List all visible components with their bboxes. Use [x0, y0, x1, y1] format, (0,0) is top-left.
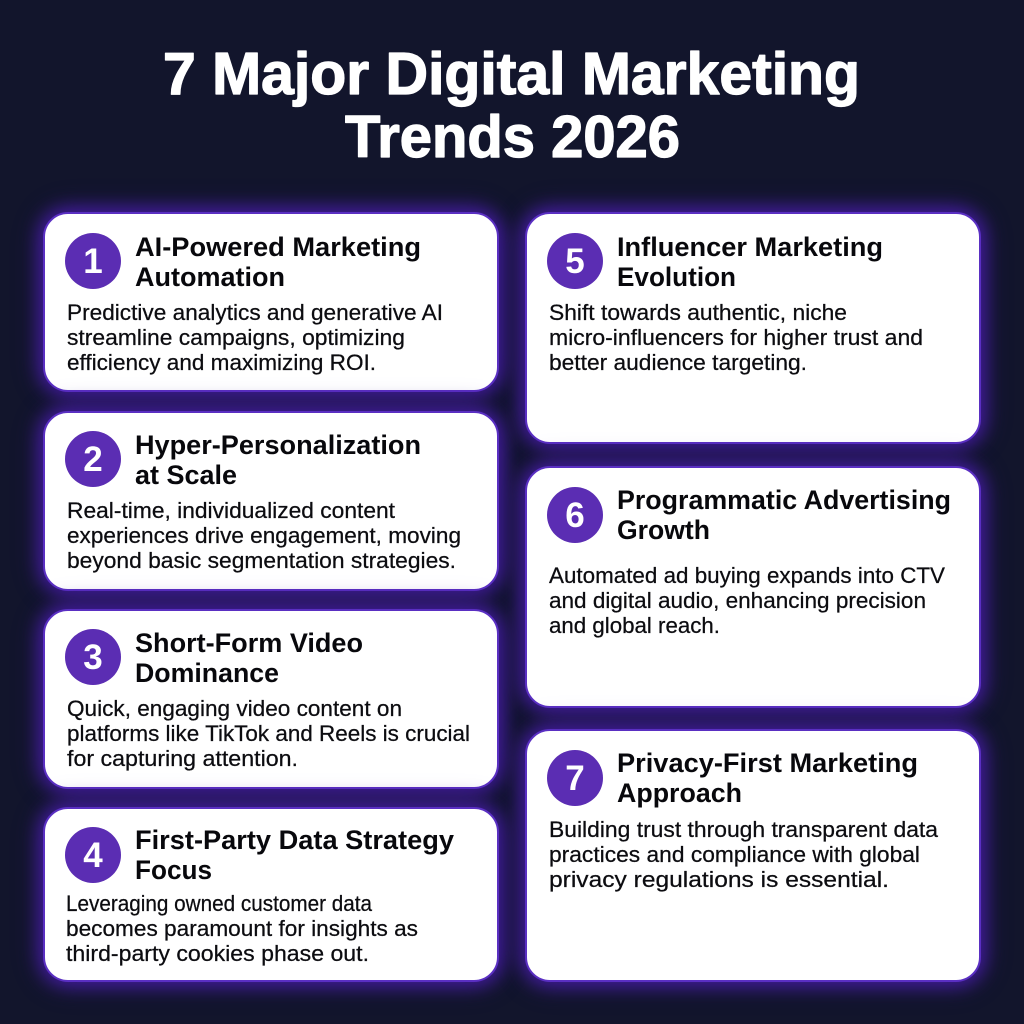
panel: trend 7: practices and compliance with global	[549, 842, 920, 867]
panel: trend 3: Short-Form Video	[135, 628, 363, 658]
panel: trend 7: Approach	[617, 778, 742, 808]
panel: trend 3: for capturing attention.	[67, 746, 298, 771]
panel: trend 3: Dominance	[135, 658, 279, 688]
panel: trend 6: and digital audio, enhancing precision	[549, 588, 926, 613]
panel: trend 5: Evolution	[617, 262, 736, 292]
panel: trend 1: Predictive analytics and generative AI	[67, 300, 443, 325]
panel: trend 7: Privacy-First Marketing	[617, 748, 918, 778]
panel: trend 6: Growth	[617, 515, 710, 545]
panel: trend 2: Hyper-Personalization	[135, 430, 421, 460]
panel: trend 2: Real-time, individualized content	[67, 498, 396, 523]
panel: trend 6	[526, 467, 980, 707]
panel: trend 2: beyond basic segmentation strategies.	[67, 548, 456, 573]
panel: trend 2	[44, 412, 498, 590]
panel: trend 1: AI-Powered Marketing	[135, 232, 421, 262]
panel: trend 4: 4	[83, 836, 103, 875]
panel: trend 4: First-Party Data Strategy	[135, 825, 454, 855]
panel: trend 3: Quick, engaging video content on	[67, 696, 402, 721]
panel: trend 5: better audience targeting.	[549, 350, 807, 375]
panel: trend 3: platforms like TikTok and Reels is crucial	[67, 721, 470, 746]
panel: trend 1: streamline campaigns, optimizing	[67, 325, 405, 350]
panel: trend 6: 6	[565, 496, 585, 535]
panel: trend 3: 3	[83, 638, 103, 677]
panel: trend 2: at Scale	[135, 460, 237, 490]
panel: trend 3	[44, 610, 498, 788]
panel: trend 5: 5	[565, 242, 585, 281]
panel: trend 1	[44, 213, 498, 391]
title	[163, 41, 860, 170]
panel: trend 6: Automated ad buying expands into CTV	[549, 563, 945, 588]
panel: trend 6: Programmatic Advertising	[617, 485, 951, 515]
panel: trend 7: privacy regulations is essential.	[549, 867, 889, 892]
title: 7 Major Digital Marketing	[163, 41, 860, 107]
panel: trend 6: and global reach.	[549, 613, 720, 638]
panel: trend 7: Building trust through transparent data	[549, 817, 938, 842]
panel: trend 4: third-party cookies phase out.	[66, 941, 369, 966]
panel: trend 7	[526, 730, 980, 981]
panel: trend 4: Leveraging owned customer data	[66, 891, 372, 916]
panel: trend 5: Shift towards authentic, niche	[549, 300, 847, 325]
panel: trend 2: 2	[83, 440, 103, 479]
panel: trend 2: experiences drive engagement, moving	[67, 523, 461, 548]
panel: trend 5: Influencer Marketing	[617, 232, 883, 262]
panel: trend 7: 7	[565, 759, 585, 798]
title: Trends 2026	[345, 104, 680, 170]
panel: trend 4: Focus	[135, 855, 212, 885]
panel: trend 1: 1	[83, 242, 103, 281]
panel: trend 5	[526, 213, 980, 443]
panel: trend 1: efficiency and maximizing ROI.	[67, 350, 376, 375]
panel: trend 1: Automation	[135, 262, 285, 292]
panel: trend 5: micro-influencers for higher trust and	[549, 325, 923, 350]
panel: trend 4	[44, 808, 498, 981]
panel: trend 4: becomes paramount for insights as	[66, 916, 418, 941]
